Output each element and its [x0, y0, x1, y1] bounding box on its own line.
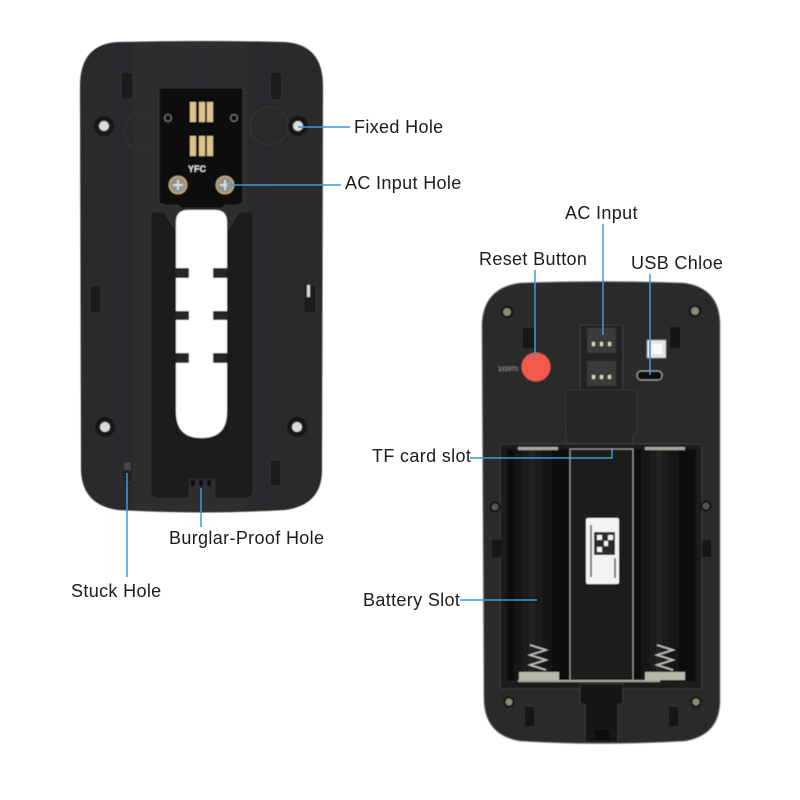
icon: springs: [530, 645, 673, 670]
callout: USB Chloe: [631, 253, 723, 375]
icon: gold contacts: [190, 102, 213, 156]
icon: reset button: [522, 352, 550, 382]
callout: USB Chloe: USB Chloe: [631, 253, 723, 273]
icon: micro USB port: [637, 371, 662, 380]
panel: centre spine: [570, 449, 633, 681]
icon: slot tabs: [176, 268, 227, 363]
icon: board vias: [165, 115, 237, 121]
callout: Reset Button: [479, 249, 587, 358]
icon: white indicator block: [647, 340, 666, 358]
callout: Stuck Hole: Stuck Hole: [71, 581, 162, 601]
callout: AC Input Hole: AC Input Hole: [345, 173, 462, 193]
icon: metal contacts: [518, 447, 685, 682]
icon: faint moulded circles: [125, 107, 288, 149]
panel: textured slot surround: [152, 213, 252, 497]
panel: mounting plate: [80, 41, 323, 512]
panel: battery bay: [490, 444, 710, 689]
text: YFC silk screen: YFC: [188, 164, 207, 174]
icon: stuck hole: [122, 460, 133, 482]
icon: top screws: [502, 306, 700, 317]
panel: doorbell back: [482, 282, 720, 744]
text: small marking: 183970: [498, 367, 519, 373]
callout: Fixed Hole: Fixed Hole: [354, 117, 444, 137]
icon: QR label: [586, 518, 619, 584]
icon: spring bases: [519, 672, 685, 680]
icon: contact block: [580, 325, 623, 393]
panel: white slot: [176, 210, 227, 438]
icon: bottom screws: [504, 698, 700, 706]
icon: right battery cell: [634, 449, 696, 681]
callout: AC Input: AC Input: [565, 203, 638, 223]
icon: left battery cell: [507, 449, 569, 681]
callout: Burglar-Proof Hole: Burglar-Proof Hole: [169, 528, 324, 548]
callout: AC Input: [565, 203, 638, 335]
icon: top and side clips: [90, 72, 316, 486]
panel: battery cover tab: [565, 390, 637, 443]
icon: burglar-proof hole: [191, 480, 211, 486]
callout: Reset Button: Reset Button: [479, 249, 587, 269]
icon: fixed holes: [94, 116, 308, 437]
callout: TF card slot: [372, 446, 612, 466]
callout: Battery Slot: Battery Slot: [363, 590, 460, 610]
icon: AC screws: [170, 176, 234, 194]
callout: TF card slot: TF card slot: [372, 446, 471, 466]
icon: bay screws: [490, 502, 710, 512]
panel: circuit board: [159, 88, 243, 208]
icon: small white clip marker: [307, 285, 310, 297]
icon: side vents: [492, 540, 711, 726]
icon: bottom latch: [580, 684, 623, 742]
icon: top vents: [523, 327, 680, 348]
callout: Stuck Hole: [71, 473, 162, 601]
